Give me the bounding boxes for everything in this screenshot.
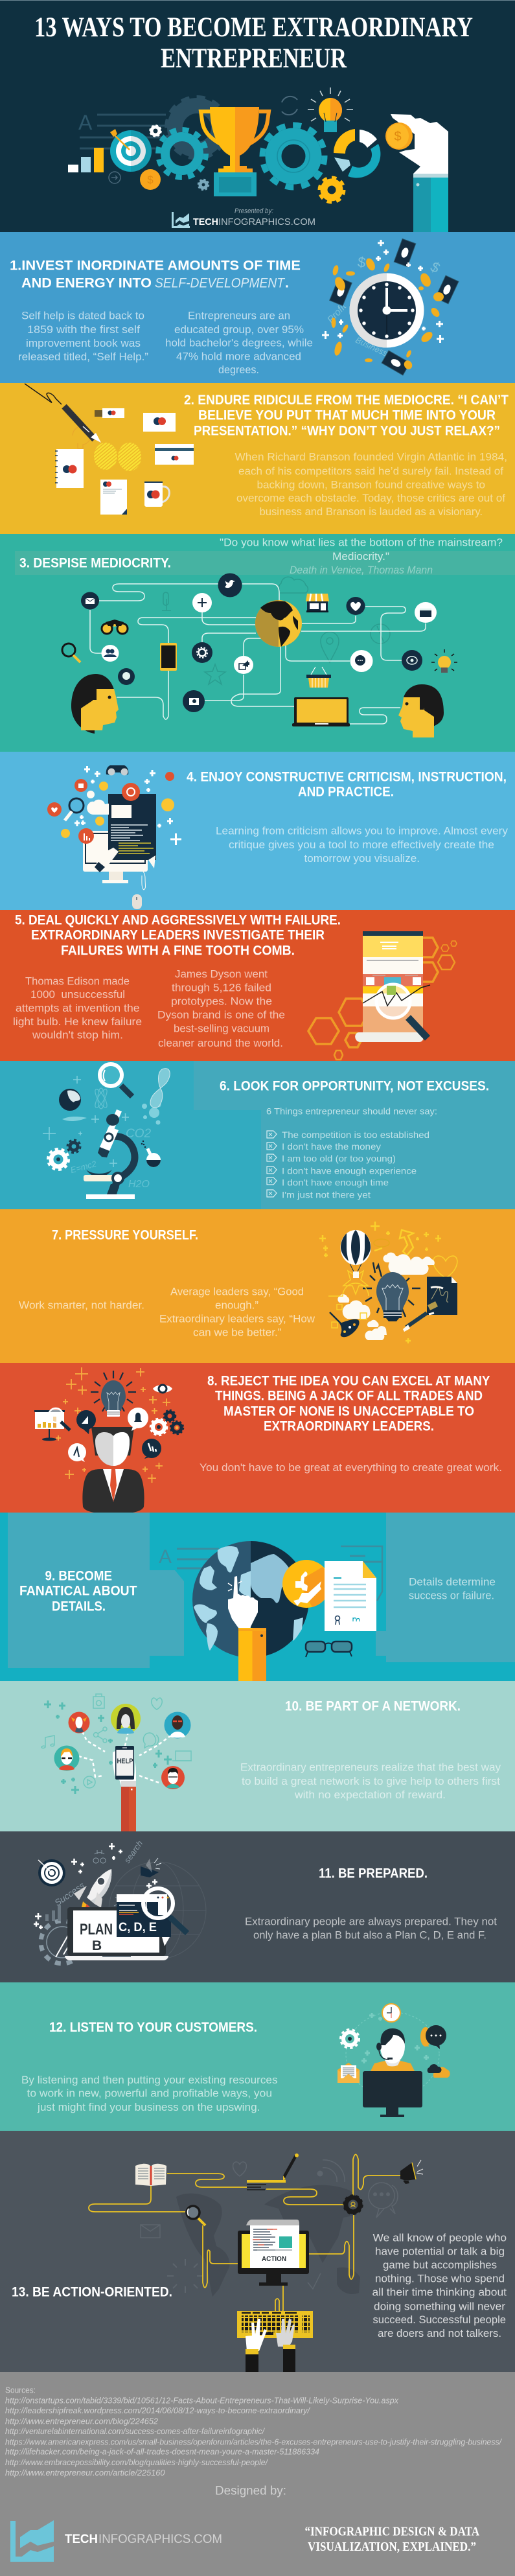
text: build a great network: with no expectation of reward.: [294, 1789, 446, 1801]
text: self help history: improvement book was: [26, 338, 141, 349]
text: richard branson: [235, 452, 507, 518]
text: sources list: [5, 2386, 502, 2477]
tagline: [304, 2524, 479, 2554]
text: sources list: http://onstartups.com/tabid/3339/bid/10561/12-Facts-About-Entrepreneurs-That-Will-Likely-Surprise-You.aspx: [5, 2396, 399, 2405]
heading 1: AND ENERGY INTO: [21, 276, 152, 290]
illustration: globe, hand and document: A: [159, 1546, 172, 1568]
title: ENTREPRENEUR: [161, 43, 347, 74]
heading 1: .: [285, 276, 289, 290]
illustration: plan b laptop and rocket: B: [92, 1938, 102, 1953]
illustration: plan b laptop and rocket: Success: [52, 1880, 87, 1908]
illustration: customer support agent: [338, 2004, 450, 2117]
text: always prepared: [245, 1916, 497, 1942]
text: doers not talkers: nothing. Those who spend: [375, 2273, 505, 2285]
illustration: website scroll and magnifier: [308, 931, 457, 1060]
heading 12: 12. LISTEN TO YOUR CUSTOMERS.: [49, 2020, 257, 2035]
presented by credit: Presented by:: [235, 207, 273, 215]
panel: 7 pressure yourself: [0, 1209, 515, 1363]
heading 9: FANATICAL ABOUT: [19, 1584, 137, 1599]
text: listening to customers: [21, 2074, 277, 2113]
text: thomas edison: Thomas Edison made: [25, 975, 130, 987]
icon: clock with money: [322, 238, 459, 375]
text: details determine: Details determine: [409, 1577, 496, 1588]
text: entrepreneur education: Entrepreneurs are an: [188, 310, 290, 322]
heading 8: [207, 1373, 490, 1434]
heading 8: THINGS. BEING A JACK OF ALL TRADES AND: [215, 1389, 483, 1404]
text: richard branson: each of his competitors said he’d surely fail. Instead of: [238, 465, 503, 477]
heading 1: 1.INVEST INORDINATE AMOUNTS OF TIME: [10, 258, 301, 273]
logo: techinfographics footer: TECH: [65, 2532, 98, 2546]
heading 3: 3. DESPISE MEDIOCRITY.: [19, 556, 171, 571]
panel: 6 opportunity not excuses: [0, 1061, 515, 1209]
text: doers not talkers: succeed. Successful people: [373, 2314, 506, 2326]
heading 5: [15, 913, 341, 958]
diagram: connected network: [62, 573, 457, 737]
panel: 9 fanatical about details: [0, 1513, 515, 1681]
illustration: plan b laptop and rocket: search: [122, 1839, 144, 1865]
tagline: “INFOGRAPHIC DESIGN & DATA: [304, 2524, 479, 2538]
panel: 11 be prepared: [0, 1831, 515, 1982]
text: build a great network: [240, 1762, 501, 1801]
text: richard branson: business and Branson is lauded as a visionary.: [259, 506, 483, 518]
illustration: balloon, bulb and clouds: [319, 1222, 457, 1343]
text: doers not talkers: [372, 2232, 507, 2339]
text: mainstream quote: [220, 537, 503, 576]
panel: 1 self-development: [0, 232, 515, 383]
text: thomas edison: light bulb. He knew failure: [13, 1016, 142, 1028]
list: six excuses: I don't have the money: [282, 1141, 381, 1152]
text: sources list: Sources:: [5, 2386, 36, 2395]
logo: techinfographics footer: INFOGRAPHICS.COM: [98, 2532, 222, 2546]
text: james dyson: through 5,126 failed: [172, 982, 271, 993]
icon: clock with money: Business: [354, 335, 389, 358]
text: entrepreneur education: hold bachelor's degrees, while: [165, 337, 313, 349]
text: mainstream quote: Death in Venice, Thomas Mann: [290, 564, 433, 576]
text: entrepreneur education: degrees.: [218, 364, 259, 376]
illustration: success gears and trophy: [68, 87, 448, 232]
text: entrepreneur education: educated group, over 95%: [174, 324, 304, 336]
text: build a great network: Extraordinary entrepreneurs realize that the best way: [240, 1762, 501, 1774]
illustration: success gears and trophy: A: [78, 111, 93, 134]
panel: 4 constructive criticism: [0, 752, 515, 910]
text: entrepreneur education: 47% hold more advanced: [176, 351, 301, 362]
title: [34, 12, 473, 74]
text: great work: You don't have to be great at everything to create great work.: [200, 1462, 502, 1474]
illustration: globe, hand and document: [159, 1541, 382, 1681]
text: thomas edison: wouldn't stop him.: [32, 1030, 123, 1041]
text: doers not talkers: We all know of people who: [373, 2232, 507, 2244]
text: details determine: [409, 1577, 496, 1602]
heading 8: 8. REJECT THE IDEA YOU CAN EXCEL AT MANY: [207, 1373, 490, 1388]
panel: 3 despise mediocrity: [0, 534, 515, 752]
list: six excuses: I am too old (or too young): [282, 1154, 396, 1164]
text: thomas edison: attempts at invention the: [16, 1003, 140, 1014]
text: work smarter: Work smarter, not harder.: [19, 1299, 144, 1311]
text: listening to customers: By listening and then putting your existing resources: [21, 2074, 277, 2086]
illustration: microscope and science icons: E=mc2: [69, 1159, 98, 1175]
text: self help history: released titled, “Self Help.”: [18, 351, 148, 363]
heading 9: DETAILS.: [52, 1599, 106, 1614]
heading 1: SELF-DEVELOPMENT: [155, 276, 286, 290]
panel: header: [0, 0, 515, 232]
text: average vs extraordinary leaders: [159, 1286, 315, 1339]
icon: clock with money: Profit: [325, 301, 349, 325]
text: average vs extraordinary leaders: Average leaders say, “Good: [170, 1286, 304, 1297]
heading 11: 11. BE PREPARED.: [319, 1866, 428, 1881]
heading 5: EXTRAORDINARY LEADERS INVESTIGATE THEIR: [31, 927, 325, 942]
illustration: phone network: HELP: [117, 1758, 133, 1765]
illustration: computer and document: [47, 765, 181, 909]
icon: clock with money: $: [356, 253, 367, 271]
illustration: success gears and trophy: $: [394, 130, 402, 144]
text: richard branson: backing down, Branson found creative ways to: [257, 479, 485, 491]
logo: techinfographics: [172, 212, 315, 228]
heading 6: 6. LOOK FOR OPPORTUNITY, NOT EXCUSES.: [220, 1079, 489, 1094]
text: sources list: http://venturelabinternational.com/success-comes-after-failureinfographic/: [5, 2427, 265, 2436]
text: learning from criticism: [216, 826, 509, 864]
text: james dyson: prototypes. Now the: [171, 996, 272, 1008]
list: six excuses: I'm just not there yet: [282, 1189, 371, 1200]
diagram: action workflow: ACTION: [262, 2255, 286, 2263]
text: doers not talkers: are doers and not talkers.: [378, 2328, 501, 2339]
text: mainstream quote: Mediocrity.": [332, 551, 389, 563]
text: things never to say: 6 Things entrepreneur should never say:: [266, 1106, 437, 1116]
illustration: pen and branding stationery: [25, 384, 194, 515]
text: doers not talkers: all their time thinking about: [372, 2287, 507, 2299]
text: james dyson: Dyson brand is one of the: [157, 1010, 285, 1021]
tagline: VISUALIZATION, EXPLAINED.”: [308, 2540, 476, 2554]
heading 5: FAILURES WITH A FINE TOOTH COMB.: [61, 943, 295, 958]
text: james dyson: cleaner around the world.: [158, 1038, 283, 1049]
heading 4: [187, 770, 507, 799]
logo: techinfographics footer: [10, 2520, 222, 2562]
illustration: phone network: [41, 1694, 192, 1831]
panel: 2 endure ridicule: [0, 383, 515, 534]
text: learning from criticism: Learning from criticism allows you to improve. Almost every: [216, 826, 509, 837]
text: doers not talkers: doing something will never: [374, 2301, 506, 2312]
panel: 10 part of a network: [0, 1681, 515, 1831]
illustration: leader with ideas: [34, 1367, 183, 1514]
heading 8: EXTRAORDINARY LEADERS.: [264, 1419, 434, 1434]
text: details determine: success or failure.: [409, 1590, 494, 1602]
illustration: plan b laptop and rocket: C, D, E: [119, 1921, 157, 1934]
list: six excuses: I don't have enough experience: [282, 1166, 417, 1176]
illustration: microscope and science icons: [43, 1064, 170, 1199]
text: average vs extraordinary leaders: Extraordinary leaders say, “How: [159, 1314, 315, 1325]
illustration: plan b laptop and rocket: PLAN: [80, 1921, 113, 1938]
text: sources list: http://leadershipfreak.wordpress.com/2014/06/08/12-ways-to-become-extraordinary/: [5, 2406, 311, 2415]
panel: 8 reject jack of all trades: [0, 1363, 515, 1514]
text: average vs extraordinary leaders: can we be better.”: [193, 1327, 281, 1339]
icon: clock with money: $: [428, 258, 442, 276]
text: designed by: Designed by:: [215, 2484, 286, 2498]
heading 9: 9. BECOME: [45, 1568, 112, 1583]
text: james dyson: best-selling vacuum: [174, 1023, 269, 1035]
text: thomas edison: [13, 975, 142, 1041]
text: thomas edison: 1000 unsuccessful: [30, 989, 125, 1001]
illustration: success gears and trophy: $: [147, 174, 154, 186]
heading 8: MASTER OF NONE IS UNACCEPTABLE TO: [223, 1404, 474, 1419]
heading 5: 5. DEAL QUICKLY AND AGGRESSIVELY WITH FAILURE.: [15, 913, 341, 928]
diagram: action workflow: [89, 2153, 423, 2372]
list: six excuses: I don't have enough time: [282, 1177, 389, 1187]
text: self help history: 1859 with the first self: [27, 324, 140, 336]
text: sources list: https://www.americanexpress.com/us/small-business/openforum/articles/the-6-excuses-entrepreneurs-use-to-justify-their-struggling-business/: [5, 2437, 502, 2446]
list: six excuses: [267, 1130, 429, 1200]
text: learning from criticism: tomorrow you visualize.: [304, 853, 420, 864]
text: doers not talkers: game but accomplishes: [383, 2260, 497, 2271]
text: listening to customers: to work in new, powerful and profitable ways, you: [27, 2087, 272, 2099]
text: sources list: http://www.entrepreneur.com/article/225160: [5, 2468, 165, 2477]
text: sources list: http://lifehacker.com/being-a-jack-of-all-trades-doesnt-mean-youre-a-master-511886334: [5, 2448, 319, 2457]
text: richard branson: When Richard Branson founded Virgin Atlantic in 1984,: [235, 452, 507, 463]
heading 2: BELIEVE YOU PUT THAT MUCH TIME INTO YOUR: [198, 408, 496, 423]
text: james dyson: [157, 968, 285, 1049]
text: entrepreneur education: [165, 310, 313, 376]
text: richard branson: overcome each obstacle. Today, those critics are out of: [236, 493, 505, 504]
heading 13: 13. BE ACTION-ORIENTED.: [12, 2285, 172, 2300]
illustration: microscope and science icons: CO2: [126, 1127, 152, 1141]
text: learning from criticism: critique gives you a tool to more effectively create the: [229, 839, 494, 851]
text: james dyson: James Dyson went: [175, 968, 268, 980]
text: sources list: http://www.embracepossibility.com/blog/qualities-highly-successful-people/: [5, 2458, 268, 2467]
heading 7: 7. PRESSURE YOURSELF.: [52, 1227, 198, 1242]
heading 4: AND PRACTICE.: [298, 784, 394, 799]
text: self help history: [18, 310, 148, 363]
panel: 12 listen to customers: [0, 1982, 515, 2131]
panel: 13 action-oriented: [0, 2131, 515, 2372]
heading 10: 10. BE PART OF A NETWORK.: [285, 1699, 461, 1713]
logo: techinfographics: INFOGRAPHICS.COM: [218, 216, 315, 227]
text: listening to customers: just might find your business on the upswing.: [37, 2102, 260, 2113]
heading 1: [10, 258, 301, 290]
heading 2: [184, 393, 509, 439]
illustration: microscope and science icons: H2O: [128, 1179, 150, 1190]
list: six excuses: The competition is too established: [282, 1130, 429, 1140]
text: always prepared: Extraordinary people are always prepared. They not: [245, 1916, 497, 1928]
heading 9: [19, 1568, 137, 1614]
illustration: plan b laptop and rocket: [34, 1839, 206, 1964]
panel: 5 deal with failure: [0, 910, 515, 1061]
panel: sources and footer: [0, 2372, 515, 2576]
logo: techinfographics: TECH: [193, 216, 218, 227]
text: sources list: http://www.entrepreneur.com/blog/224652: [5, 2417, 158, 2426]
text: build a great network: to build a great network is to give help to others first: [242, 1776, 500, 1787]
text: doers not talkers: have potential or talk a big: [375, 2245, 505, 2257]
text: average vs extraordinary leaders: enough.”: [215, 1299, 258, 1311]
text: mainstream quote: "Do you know what lies at the bottom of the mainstream?: [220, 537, 503, 549]
text: self help history: Self help is dated back to: [21, 310, 144, 322]
text: always prepared: only have a plan B but also a Plan C, D, E and F.: [253, 1930, 486, 1942]
